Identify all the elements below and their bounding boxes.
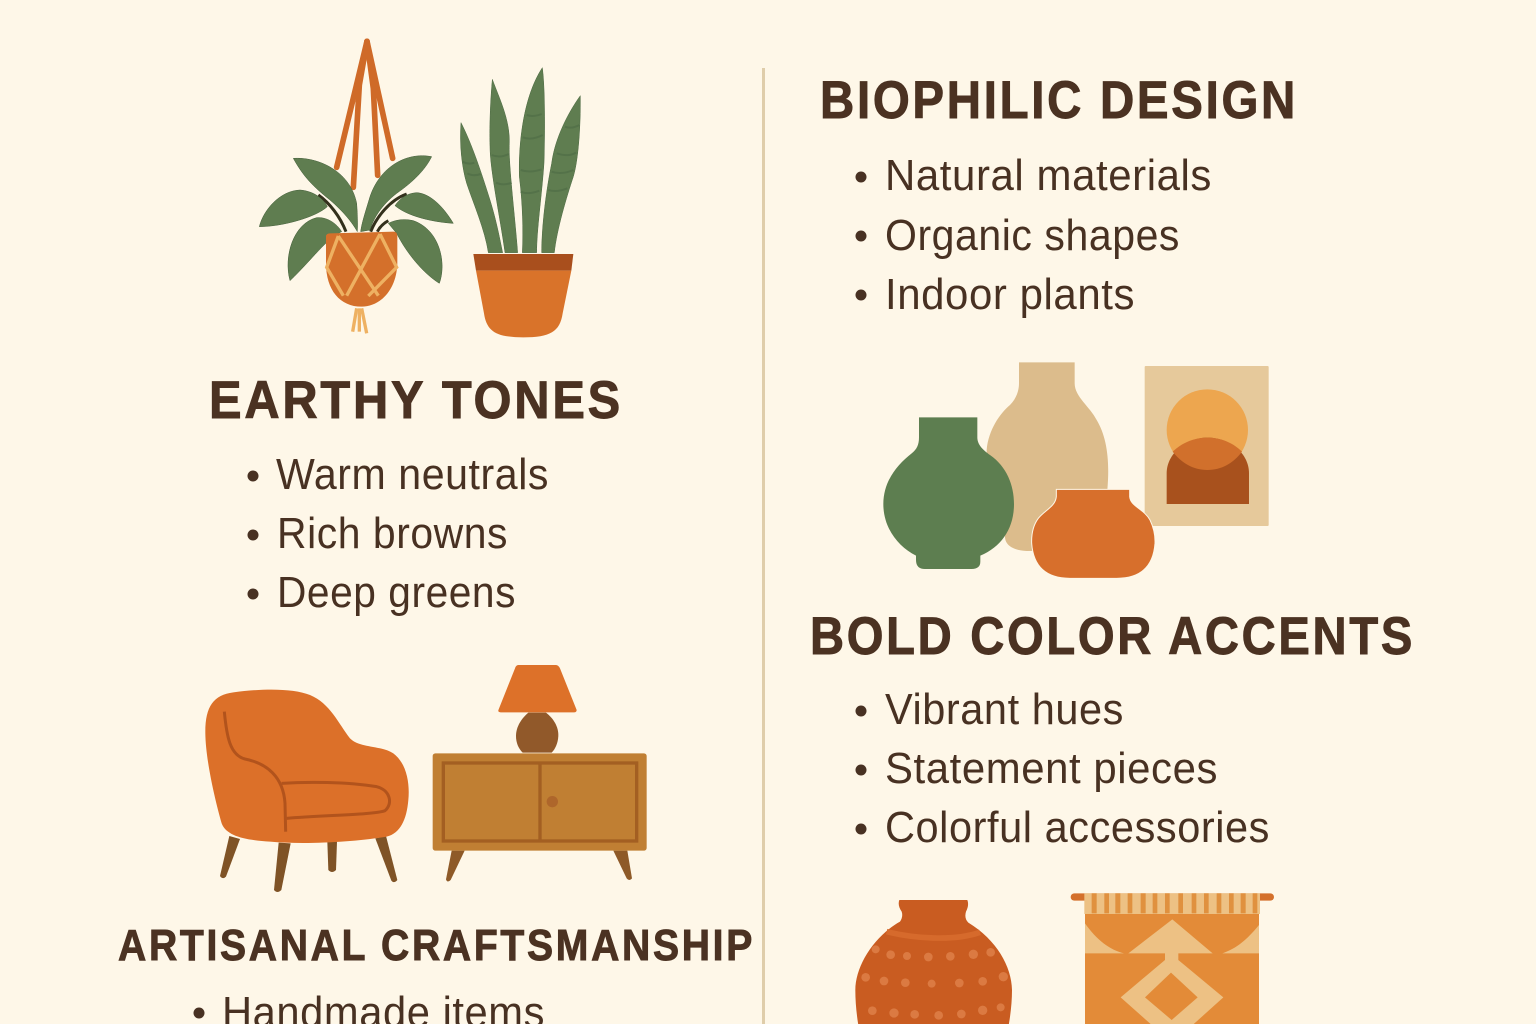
- chair legs: [220, 836, 397, 892]
- pot rim: [473, 254, 573, 271]
- chair seams: [224, 712, 390, 832]
- rod: [1071, 893, 1274, 901]
- section: artisanal craftsmanship: [118, 921, 755, 1024]
- pot: [326, 232, 397, 307]
- chair body: [205, 690, 409, 843]
- icon: armchair: [205, 690, 409, 892]
- leaf bands: [463, 114, 579, 193]
- icon: vases and art print: [883, 362, 1269, 578]
- list: [856, 685, 1270, 852]
- section: bold color accents: [810, 607, 1415, 852]
- pot body: [855, 900, 1012, 1024]
- list: Warm neutrals: [276, 450, 549, 499]
- list: Indoor plants: [885, 270, 1135, 319]
- list: Statement pieces: [885, 744, 1218, 793]
- cabinet doors: [443, 763, 637, 841]
- icon: hanging plant in macrame pot: [259, 41, 453, 333]
- lamp shade: [498, 665, 577, 712]
- list: Organic shapes: [885, 211, 1180, 260]
- heading: BOLD COLOR ACCENTS: [810, 607, 1415, 666]
- list: [856, 151, 1212, 319]
- pot band: [887, 932, 980, 938]
- fringe stripes: [1092, 893, 1257, 913]
- list: Vibrant hues: [885, 685, 1124, 734]
- list: Deep greens: [277, 568, 516, 617]
- list: Rich browns: [277, 509, 508, 558]
- icon: sideboard with lamp: [433, 665, 647, 882]
- lamp base: [516, 713, 558, 753]
- art print: [1145, 366, 1269, 526]
- icon: terracotta pot: [855, 900, 1012, 1024]
- leaves: [259, 156, 453, 283]
- heading: BIOPHILIC DESIGN: [820, 71, 1298, 130]
- diamond centre: [1145, 973, 1198, 1020]
- list: Natural materials: [885, 151, 1212, 200]
- woven pattern: [1085, 919, 1259, 1024]
- macrame ropes: [337, 41, 393, 187]
- section: earthy tones: [209, 371, 623, 617]
- pot body: [476, 271, 571, 337]
- list: Colorful accessories: [885, 803, 1270, 852]
- heading: ARTISANAL CRAFTSMANSHIP: [118, 921, 755, 970]
- list: [248, 450, 549, 617]
- cabinet legs: [446, 851, 632, 882]
- knob: [547, 796, 558, 807]
- pot dots: [861, 945, 1008, 1020]
- dark stems: [318, 194, 407, 232]
- icon: woven wall hanging: [1071, 893, 1274, 1024]
- snake plant leaves: [460, 68, 580, 253]
- beige vase: [987, 362, 1108, 551]
- section: biophilic design: [820, 71, 1298, 319]
- orange vase: [1032, 489, 1155, 578]
- heading: EARTHY TONES: [209, 371, 623, 430]
- hanging body: [1085, 913, 1259, 1024]
- cabinet: [433, 753, 647, 851]
- pot netting: [327, 234, 397, 333]
- green vase: [883, 417, 1014, 569]
- fringe: [1084, 893, 1260, 914]
- icon: snake plant in pot: [460, 68, 580, 337]
